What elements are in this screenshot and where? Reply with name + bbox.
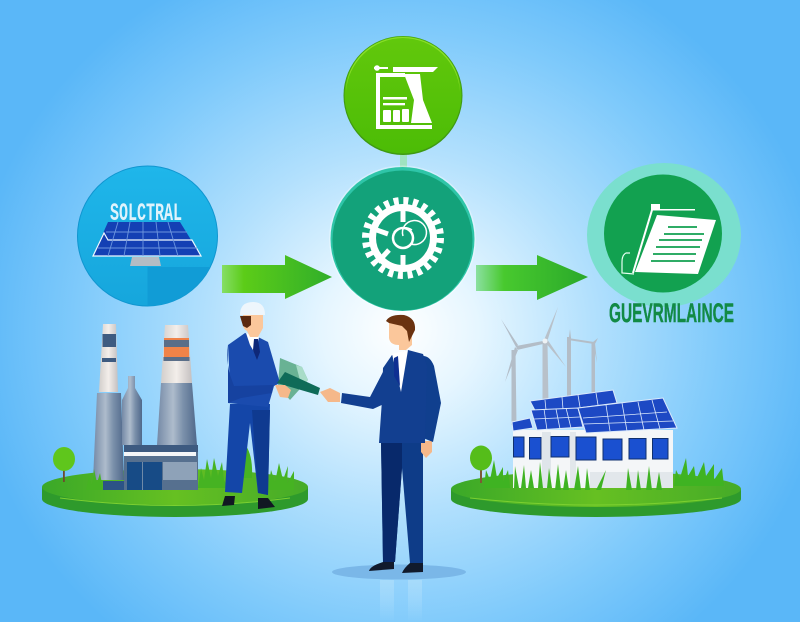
shirt and tie	[392, 350, 408, 392]
connector between top and centre circles	[400, 152, 407, 170]
icon circle: solar panel	[78, 166, 218, 306]
left platform: factory	[42, 324, 308, 517]
head	[389, 320, 412, 350]
shoes	[222, 496, 275, 509]
icon circle: governance document	[587, 163, 741, 307]
hand shake	[320, 388, 340, 402]
shoes	[369, 562, 423, 573]
tree	[53, 447, 75, 482]
turbine 3	[567, 329, 598, 397]
head	[243, 315, 263, 337]
person: engineer with hard hat	[222, 302, 320, 509]
green sleeve	[277, 372, 320, 395]
shirt and tie	[246, 333, 259, 355]
document icon	[374, 65, 438, 129]
legs	[381, 441, 423, 563]
document icon	[622, 204, 716, 274]
hand	[275, 385, 291, 398]
grass behind factory	[198, 446, 294, 490]
factory	[93, 324, 198, 490]
chimney stack right	[157, 325, 197, 445]
folder	[278, 358, 308, 400]
jacket	[228, 333, 280, 407]
far arm	[423, 356, 441, 442]
chimney stack left	[93, 324, 124, 480]
hair	[386, 315, 415, 342]
factory building	[103, 445, 198, 490]
grass in front of factory	[86, 469, 103, 490]
island base	[451, 471, 741, 517]
torso	[379, 350, 427, 443]
legs	[225, 404, 270, 495]
house building	[513, 430, 673, 488]
wind turbines	[501, 307, 598, 425]
right platform: renewable site	[451, 307, 741, 517]
solar panel	[93, 222, 201, 266]
grass in front of house	[484, 458, 724, 490]
extended arm	[341, 370, 384, 409]
person: man in suit	[320, 315, 441, 573]
turbine 2	[542, 307, 566, 405]
arrow: gear to compliance	[476, 255, 588, 300]
tree	[470, 446, 492, 483]
icon circle: gear	[329, 166, 476, 312]
chimney stack small	[122, 376, 142, 445]
gear icon	[366, 201, 440, 275]
hand at side	[421, 441, 432, 458]
hard hat	[240, 302, 265, 315]
rooftop solar panels	[512, 390, 677, 433]
turbine 1	[501, 319, 543, 425]
windows	[514, 436, 668, 460]
icon circle: document machine	[344, 36, 462, 155]
island base	[42, 469, 308, 517]
solar label: SOLCTRAL	[110, 199, 182, 228]
arrow: solar to gear	[222, 255, 332, 299]
floor shadow and reflection under man	[332, 564, 466, 622]
